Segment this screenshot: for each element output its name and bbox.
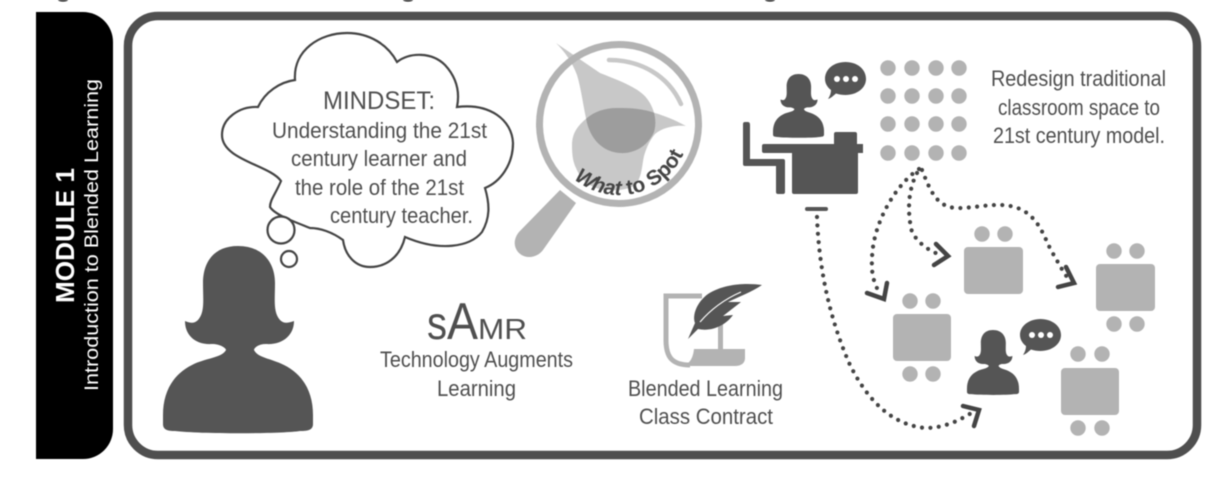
magnifier handle xyxy=(515,190,576,257)
traditional classroom seat grid xyxy=(880,60,967,161)
mindset text block xyxy=(272,118,487,228)
arrow: grid to centre table xyxy=(909,173,948,265)
contract caption: Blended Learning xyxy=(628,376,783,401)
table group: right xyxy=(1096,243,1155,332)
table group: bottom xyxy=(1061,346,1119,436)
leaf shape one xyxy=(556,43,655,153)
mindset text block: Understanding the 21st xyxy=(272,118,487,143)
thought bubble large circle xyxy=(268,216,294,244)
icon: student silhouette xyxy=(967,330,1019,395)
heading: samr: s xyxy=(427,297,447,349)
what to spot label: What to Spot xyxy=(575,148,684,196)
arrow: grid to right table xyxy=(922,170,1074,287)
module title: Introduction to Blended Learning xyxy=(81,79,103,391)
scroll xyxy=(666,296,702,365)
thought bubble small circle xyxy=(281,251,297,267)
module number: MODULE 1 xyxy=(50,168,80,303)
mindset heading: MINDSET: xyxy=(323,87,435,115)
mindset text block: century teacher. xyxy=(330,203,473,228)
redesign text block: Redesign traditional xyxy=(991,66,1166,91)
lens highlight xyxy=(609,60,681,104)
samr caption xyxy=(380,347,573,401)
mindset text block: the role of the 21st xyxy=(295,175,464,200)
arrow: grid to left table xyxy=(867,169,919,299)
quill feather xyxy=(688,284,762,339)
chair xyxy=(743,122,785,194)
heading: samr: MR xyxy=(478,314,527,346)
thought bubble: mindset xyxy=(222,33,513,267)
samr caption: Technology Augments xyxy=(380,347,573,372)
heading: samr xyxy=(427,293,527,351)
table group: centre xyxy=(964,226,1023,294)
samr caption: Learning xyxy=(437,376,516,401)
table group: left xyxy=(893,293,951,382)
arrow: teacher desk to student xyxy=(817,217,979,428)
leaf shape two xyxy=(572,108,686,190)
desk xyxy=(762,132,863,194)
icon: scroll and quill xyxy=(666,284,762,366)
redesign text block xyxy=(991,66,1166,148)
heading: samr: A xyxy=(447,293,478,351)
teacher silhouette xyxy=(773,74,824,138)
icon: magnifying glass what to spot xyxy=(514,40,702,258)
icon: teacher at desk xyxy=(743,74,863,211)
redesign text block: 21st century model. xyxy=(993,123,1165,148)
desk bar xyxy=(805,207,828,211)
icon: large person silhouette xyxy=(163,246,313,433)
mindset text block: century learner and xyxy=(291,146,467,171)
icon: student speech bubble xyxy=(1020,319,1061,355)
magnifier ring xyxy=(540,44,698,204)
redesign text block: classroom space to xyxy=(998,95,1160,120)
contract caption xyxy=(628,376,783,429)
sidebar: module label xyxy=(36,12,113,459)
icon: teacher speech bubble xyxy=(825,62,866,99)
contract caption: Class Contract xyxy=(639,404,773,429)
